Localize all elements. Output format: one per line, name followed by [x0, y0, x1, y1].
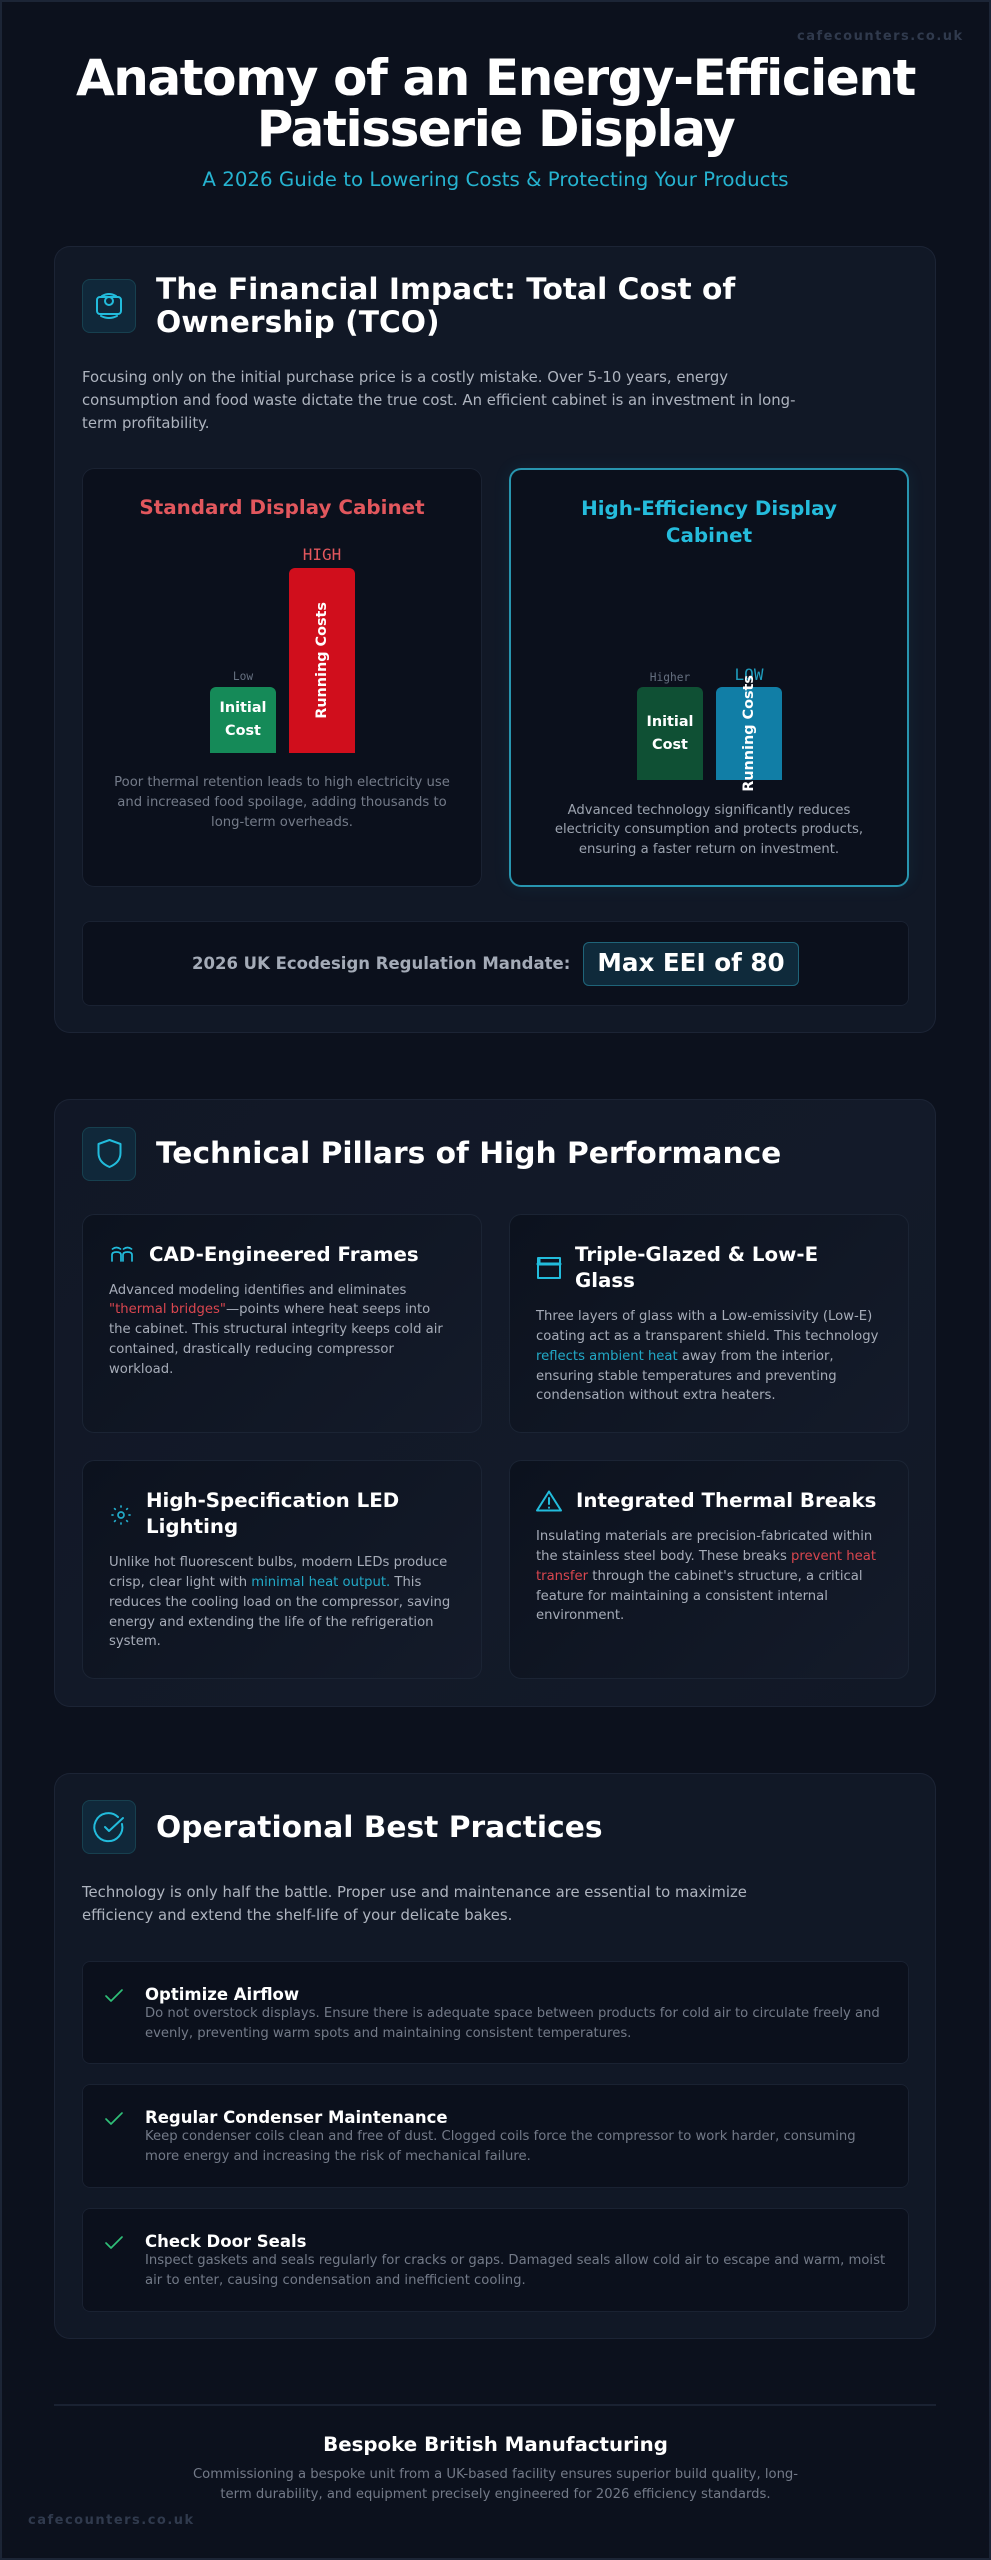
regulation strip — [82, 921, 909, 1006]
icon: shield — [82, 1127, 136, 1181]
bar label low: LOW — [735, 664, 763, 684]
section heading — [156, 272, 736, 340]
card description: long-term overheads. — [211, 815, 353, 830]
footer text — [193, 2467, 798, 2502]
intro text — [82, 1882, 747, 1924]
card: high-efficiency cabinet — [509, 468, 909, 887]
main title — [76, 49, 916, 158]
icon: glass window — [536, 1257, 562, 1279]
card title: Cabinet — [666, 524, 752, 546]
card heading: Glass — [575, 1268, 635, 1292]
panel: financial impact — [54, 246, 936, 1033]
card heading: Integrated Thermal Breaks — [576, 1488, 876, 1512]
section heading: The Financial Impact: Total Cost of — [156, 272, 735, 307]
intro text — [82, 368, 795, 432]
section heading: Technical Pillars of High Performance — [156, 1136, 781, 1171]
card text: condensation without extra heaters. — [536, 1388, 776, 1403]
item heading: Regular Condenser Maintenance — [145, 2108, 448, 2126]
item text: more energy and increasing the risk of mechanical failure. — [145, 2149, 531, 2164]
item text: Keep condenser coils clean and free of dust. Clogged coils force the compressor to work harder, consuming — [145, 2129, 856, 2144]
card description — [555, 802, 863, 857]
bar: initial cost: Cost — [225, 723, 261, 739]
bar: running costs: Running Costs — [314, 602, 330, 719]
card description: Advanced technology significantly reduces — [568, 802, 850, 818]
bar: initial cost: Initial — [220, 700, 266, 716]
card text: crisp, clear light with minimal heat output. This — [109, 1575, 421, 1590]
card heading: Triple-Glazed & Low-E — [575, 1242, 818, 1266]
card description: Poor thermal retention leads to high electricity use — [114, 775, 450, 790]
icon: money cabinet — [82, 279, 136, 333]
card text: "thermal bridges"—points where heat seeps into — [109, 1302, 430, 1317]
card: standard cabinet — [82, 468, 482, 887]
card text: environment. — [536, 1608, 624, 1623]
bar: running costs — [289, 568, 355, 753]
card text: ensuring stable temperatures and preventing — [536, 1369, 837, 1384]
card description: electricity consumption and protects products, — [555, 822, 863, 837]
regulation badge: Max EEI of 80 — [597, 948, 785, 976]
card text: energy and extending the life of the refrigeration — [109, 1615, 434, 1630]
card description: and increased food spoilage, adding thousands to — [117, 795, 447, 810]
card heading — [575, 1242, 818, 1292]
subtitle: A 2026 Guide to Lowering Costs & Protecting Your Products — [202, 168, 789, 191]
card: thermal breaks — [509, 1460, 909, 1679]
card title — [581, 497, 837, 546]
item: door seals — [82, 2208, 909, 2312]
intro text: efficiency and extend the shelf-life of your delicate bakes. — [82, 1906, 512, 1924]
item: condenser — [82, 2084, 909, 2188]
card heading: CAD-Engineered Frames — [149, 1242, 419, 1266]
bar label low: Low — [233, 670, 253, 683]
card text: Unlike hot fluorescent bulbs, modern LEDs produce — [109, 1555, 447, 1570]
card text: Advanced modeling identifies and eliminates — [109, 1282, 406, 1298]
bar label high: HIGH — [303, 544, 341, 564]
card text: coating act as a transparent shield. This technology — [536, 1329, 878, 1344]
intro text: consumption and food waste dictate the true cost. An efficient cabinet is an investment in long- — [82, 390, 795, 408]
item heading: Check Door Seals — [145, 2232, 306, 2250]
icon: check — [105, 1989, 123, 2002]
section heading: Ownership (TCO) — [156, 305, 440, 340]
footer divider — [54, 2404, 936, 2406]
card description — [114, 775, 450, 830]
watermark top: cafecounters.co.uk — [797, 29, 964, 44]
icon: warning triangle — [536, 1490, 562, 1512]
panel: technical pillars — [54, 1099, 936, 1707]
card text — [109, 1282, 443, 1377]
card text: reduces the cooling load on the compressor, saving — [109, 1595, 450, 1610]
card: LED lighting — [82, 1460, 482, 1679]
card text: transfer through the cabinet's structure, a critical — [536, 1569, 862, 1584]
bar label higher: Higher — [650, 671, 690, 684]
intro text: Focusing only on the initial purchase price is a costly mistake. Over 5-10 years, energy — [82, 368, 728, 386]
bar: initial cost — [210, 687, 276, 753]
item text: evenly, preventing warm spots and maintaining consistent temperatures. — [145, 2026, 631, 2041]
bar: running costs: Running Costs — [740, 675, 756, 792]
card text — [536, 1529, 876, 1623]
icon: check — [105, 2112, 123, 2125]
icon: check circle — [82, 1800, 136, 1854]
footer heading: Bespoke British Manufacturing — [323, 2433, 668, 2456]
card heading: Lighting — [146, 1514, 238, 1538]
item text: Inspect gaskets and seals regularly for cracks or gaps. Damaged seals allow cold air to escape and warm, moist — [145, 2253, 885, 2268]
card heading: High-Specification LED — [146, 1488, 399, 1512]
icon: sun — [111, 1505, 131, 1525]
bar: initial cost: Initial — [646, 714, 694, 730]
item: airflow — [82, 1961, 909, 2064]
watermark bottom: cafecounters.co.uk — [28, 2513, 195, 2528]
card text: Three layers of glass with a Low-emissivity (Low-E) — [536, 1309, 872, 1324]
card text — [109, 1555, 450, 1649]
card text: the stainless steel body. These breaks prevent heat — [536, 1549, 876, 1564]
card text: workload. — [109, 1362, 173, 1377]
card title: Standard Display Cabinet — [139, 496, 425, 519]
card heading — [146, 1488, 399, 1538]
panel: operational best practices — [54, 1773, 936, 2339]
main title: Patisserie Display — [257, 100, 734, 158]
item text: air to enter, causing condensation and inefficient cooling. — [145, 2273, 526, 2288]
item text — [145, 2129, 856, 2164]
icon: check — [105, 2236, 123, 2249]
card: CAD frames — [82, 1214, 482, 1433]
card title: High-Efficiency Display — [581, 497, 837, 520]
main title: Anatomy of an Energy-Efficient — [76, 49, 915, 107]
footer text: term durability, and equipment precisely engineered for 2026 efficiency standards. — [220, 2487, 771, 2502]
item text — [145, 2253, 885, 2288]
card text: the cabinet. This structural integrity keeps cold air — [109, 1322, 443, 1337]
intro text: Technology is only half the battle. Proper use and maintenance are essential to maximize — [82, 1882, 747, 1900]
regulation badge — [583, 942, 799, 986]
bar: initial cost: Cost — [652, 736, 688, 752]
item text — [145, 2006, 880, 2041]
card text — [536, 1309, 878, 1403]
bar: initial cost — [637, 687, 703, 780]
footer text: Commissioning a bespoke unit from a UK-based facility ensures superior build quality, long- — [193, 2467, 798, 2482]
item text: Do not overstock displays. Ensure there is adequate space between products for cold air to circulate freely and — [145, 2006, 880, 2021]
card text: reflects ambient heat away from the interior, — [536, 1349, 834, 1364]
icon: frames — [111, 1246, 133, 1262]
item heading: Optimize Airflow — [145, 1984, 299, 2004]
card: triple glazed — [509, 1214, 909, 1433]
card text: contained, drastically reducing compressor — [109, 1342, 394, 1357]
bar: running costs — [716, 687, 782, 780]
card text: feature for maintaining a consistent internal — [536, 1589, 828, 1604]
intro text: term profitability. — [82, 414, 210, 432]
card text: Insulating materials are precision-fabricated within — [536, 1529, 872, 1544]
regulation label: 2026 UK Ecodesign Regulation Mandate: — [192, 954, 570, 973]
section heading: Operational Best Practices — [156, 1810, 603, 1845]
card text: system. — [109, 1634, 161, 1649]
card description: ensuring a faster return on investment. — [579, 842, 839, 857]
